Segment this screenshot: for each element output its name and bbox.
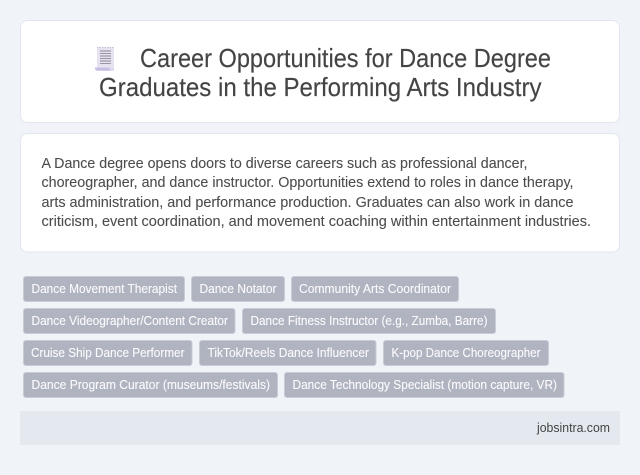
tag: TikTok/Reels Dance Influencer: TikTok/Reels Dance Influencer <box>208 345 370 360</box>
tag: Dance Program Curator <box>24 372 278 398</box>
text block: description: arts administration, and performance production. Graduates can also work in dance <box>42 195 574 211</box>
text block: description: criticism, event coordination, and movement coaching within entertainment industries. <box>42 214 591 230</box>
tag: Dance Videographer/Content Creator <box>24 308 235 334</box>
tag: Community Arts Coordinator <box>292 276 458 302</box>
title: Career Opportunities for Dance Degree <box>140 45 551 73</box>
footer <box>20 411 620 445</box>
tag group: careers <box>24 276 564 398</box>
text block: description: choreographer, and dance instructor. Opportunities extend to roles in dance therapy, <box>42 175 574 191</box>
tag: Community Arts Coordinator: Community Arts Coordinator <box>299 281 452 296</box>
tag: Dance Videographer/Content Creator: Dance Videographer/Content Creator <box>32 313 229 328</box>
tag: Dance Notator <box>192 276 284 302</box>
tag: TikTok/Reels Dance Influencer <box>200 340 376 366</box>
text block: description <box>42 156 591 230</box>
tag: Dance Notator: Dance Notator <box>200 281 277 296</box>
text block: description: A Dance degree opens doors to diverse careers such as professional dancer, <box>42 156 528 172</box>
title: Graduates in the Performing Arts Industry <box>99 74 542 102</box>
tag: Dance Fitness Instructor: Dance Fitness Instructor (e.g., Zumba, Barre) <box>250 313 488 328</box>
tag: Cruise Ship Dance Performer: Cruise Ship Dance Performer <box>31 345 185 360</box>
tag: Cruise Ship Dance Performer <box>24 340 192 366</box>
footer text: jobsintra.com: jobsintra.com <box>536 420 610 435</box>
tag: K-pop Dance Choreographer: K-pop Dance Choreographer <box>392 345 541 360</box>
tag: Dance Movement Therapist <box>24 276 184 302</box>
tag: Dance Program Curator: Dance Program Curator (museums/festivals) <box>32 377 270 392</box>
title <box>99 45 551 102</box>
tag: Dance Movement Therapist: Dance Movement Therapist <box>32 281 177 296</box>
tag: Dance Technology Specialist <box>284 372 564 398</box>
tag: Dance Technology Specialist: Dance Technology Specialist (motion capture, VR) <box>292 377 557 392</box>
tag: K-pop Dance Choreographer <box>384 340 548 366</box>
tag: Dance Fitness Instructor <box>242 308 496 334</box>
panel: header <box>20 20 620 122</box>
panel: description <box>20 134 620 252</box>
icon: document scroll <box>95 48 114 71</box>
